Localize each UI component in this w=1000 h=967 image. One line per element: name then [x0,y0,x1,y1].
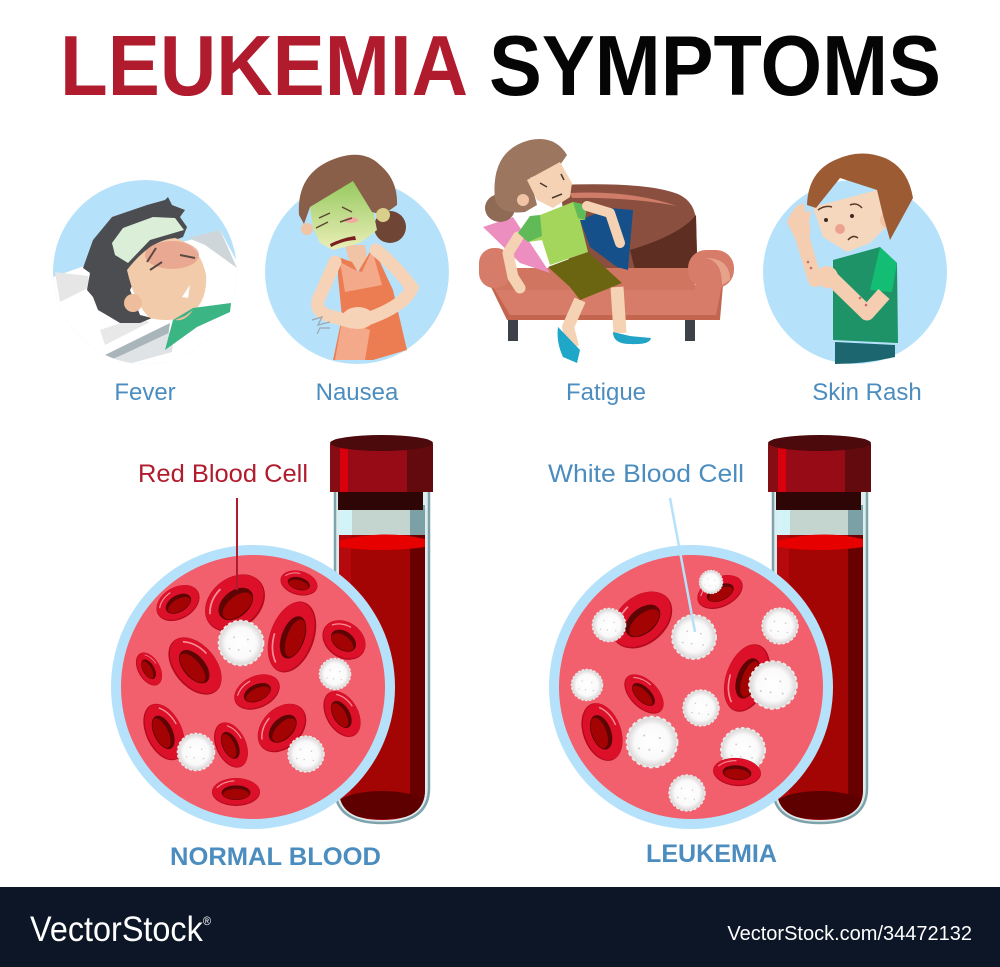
panel: fatigue [479,139,734,406]
icon: bedding [53,230,240,365]
watermark: vectorstock logo: ® [203,914,211,928]
footer bar [0,887,1000,967]
label: fatigue: Fatigue [566,379,646,406]
watermark: url: VectorStock.com/34472132 [727,923,972,945]
callout: white blood cell: White Blood Cell [548,460,744,488]
icon: test tube normal [330,435,433,825]
watermark: vectorstock logo: VectorStock [30,910,217,949]
icon: rash circle [763,180,947,364]
label: skin rash: Skin Rash [812,379,922,406]
label: fever: Fever [114,379,176,406]
title: LEUKEMIA [60,19,468,114]
icon: tired woman [485,139,651,363]
magnified circle leukemia [549,545,833,829]
icon: test tube leukemia [768,435,871,825]
panel: normal blood [111,435,433,871]
icon: boy with rash [788,153,913,364]
label: normal blood: NORMAL BLOOD [170,843,381,871]
callout: red blood cell: Red Blood Cell [138,460,308,488]
magnified circle normal [111,545,395,829]
panel: nausea [265,155,449,406]
panel: leukemia [548,435,871,868]
label: leukemia: LEUKEMIA [646,840,777,868]
panel: fever [53,180,240,406]
icon: pillows [483,217,550,273]
icon: sick boy [83,197,231,350]
icon: fever circle [53,180,237,364]
pointer line: red blood cell [236,498,238,590]
pointer line: white blood cell [670,498,695,632]
panel: skin rash [763,153,947,406]
title [60,19,941,114]
title: SYMPTOMS [489,19,941,114]
icon: sofa [479,184,734,341]
icon: nausea circle [265,180,449,364]
icon: nauseous woman [299,155,412,360]
label: nausea: Nausea [316,379,399,406]
